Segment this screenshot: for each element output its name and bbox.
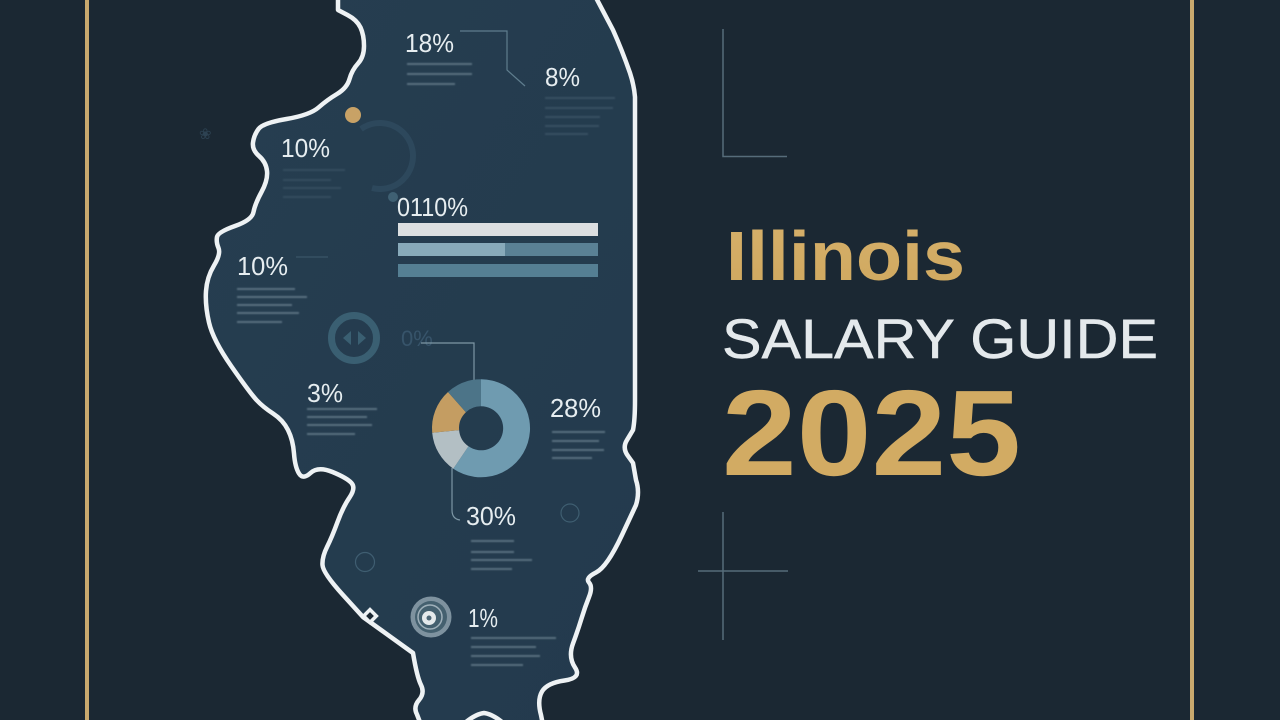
stat: 3%: 3% — [307, 378, 343, 408]
stat: 8%: 8% — [545, 62, 580, 92]
stat: bar chart label: 0110% — [397, 192, 468, 222]
title: Salary Guide: SALARY GUIDE — [722, 307, 1158, 370]
stat: 10% upper left — [281, 133, 345, 198]
stat: 3% — [307, 378, 377, 435]
left gold border line — [85, 0, 89, 720]
decorative corner line: top — [723, 29, 787, 156]
gold marker dot — [345, 107, 361, 123]
title: Illinois: Illinois — [726, 217, 965, 295]
right gold border line — [1190, 0, 1194, 720]
stat: 1%: 1% — [468, 603, 498, 633]
connector: label to donut — [421, 343, 474, 380]
stat: 18% top — [405, 28, 472, 85]
stat: 28% — [550, 393, 605, 459]
stat: 10% left — [237, 251, 328, 323]
decorative cross line: bottom — [698, 512, 788, 640]
stat: 1% — [468, 603, 556, 666]
faint label: 0% — [401, 326, 433, 351]
panel: Illinois map — [206, 0, 638, 720]
faint circle icon right — [561, 504, 579, 522]
donut chart — [432, 379, 530, 477]
stat: 30%: 30% — [466, 501, 516, 531]
faint circle icon left — [356, 552, 374, 572]
faint ring icon — [361, 123, 413, 202]
stat: 18% top: 18% — [405, 28, 454, 58]
bar chart — [398, 223, 598, 277]
icon: concentric target — [410, 596, 452, 638]
stat: 10% left: 10% — [237, 251, 288, 281]
icon: ring with arrows — [332, 316, 376, 360]
southern tip notch — [466, 713, 502, 720]
stat: 30% — [466, 501, 532, 570]
title: 2025: 2025 — [722, 365, 1021, 501]
faint glyph outside map: ❀ — [199, 126, 212, 143]
connector: 18% to 8% — [460, 31, 525, 86]
state outline — [206, 0, 638, 720]
river notch on southwest edge — [364, 610, 376, 622]
stat: 28%: 28% — [550, 393, 601, 423]
stat: 8% — [545, 62, 615, 135]
stat: 10% upper left: 10% — [281, 133, 330, 163]
connector: donut to 30% — [452, 468, 460, 520]
